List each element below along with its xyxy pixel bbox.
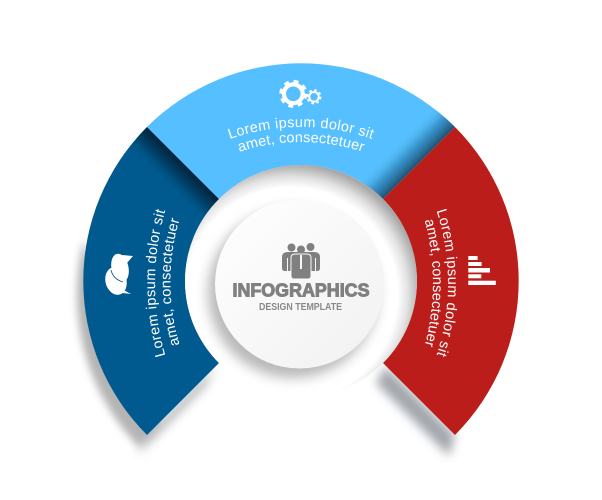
text: left segment: amet, consectetuer (162, 218, 180, 346)
text: right segment: amet, consectetuer (425, 220, 441, 348)
text: right segment: Lorem ipsum dolor sit (436, 208, 458, 357)
panel: top light blue segment (147, 63, 455, 199)
icon: gears (281, 81, 321, 106)
shadow: left outer edge (77, 240, 160, 447)
subheading: design template: DESIGN TEMPLATE (259, 302, 342, 313)
heading: infographics: INFOGRAPHICS (232, 280, 370, 300)
shadow: left segment (137, 366, 215, 455)
text: top segment: amet, consectetuer (238, 134, 365, 152)
panel: left dark blue segment (83, 127, 219, 435)
icon: bar chart (468, 256, 496, 285)
shadow: right segment (376, 366, 455, 456)
text: right segment (425, 208, 458, 357)
center disc shadow (208, 208, 378, 378)
panel: right red segment (383, 127, 519, 435)
text: left segment: Lorem ipsum dolor sit (146, 208, 166, 358)
icon: speech bubbles (102, 252, 133, 297)
text: left segment (146, 208, 180, 358)
center ring with shadow (185, 165, 417, 397)
text: top segment (228, 118, 374, 152)
icon: people group (282, 243, 320, 279)
center disc (215, 200, 384, 368)
text: top segment: Lorem ipsum dolor sit (228, 118, 374, 139)
